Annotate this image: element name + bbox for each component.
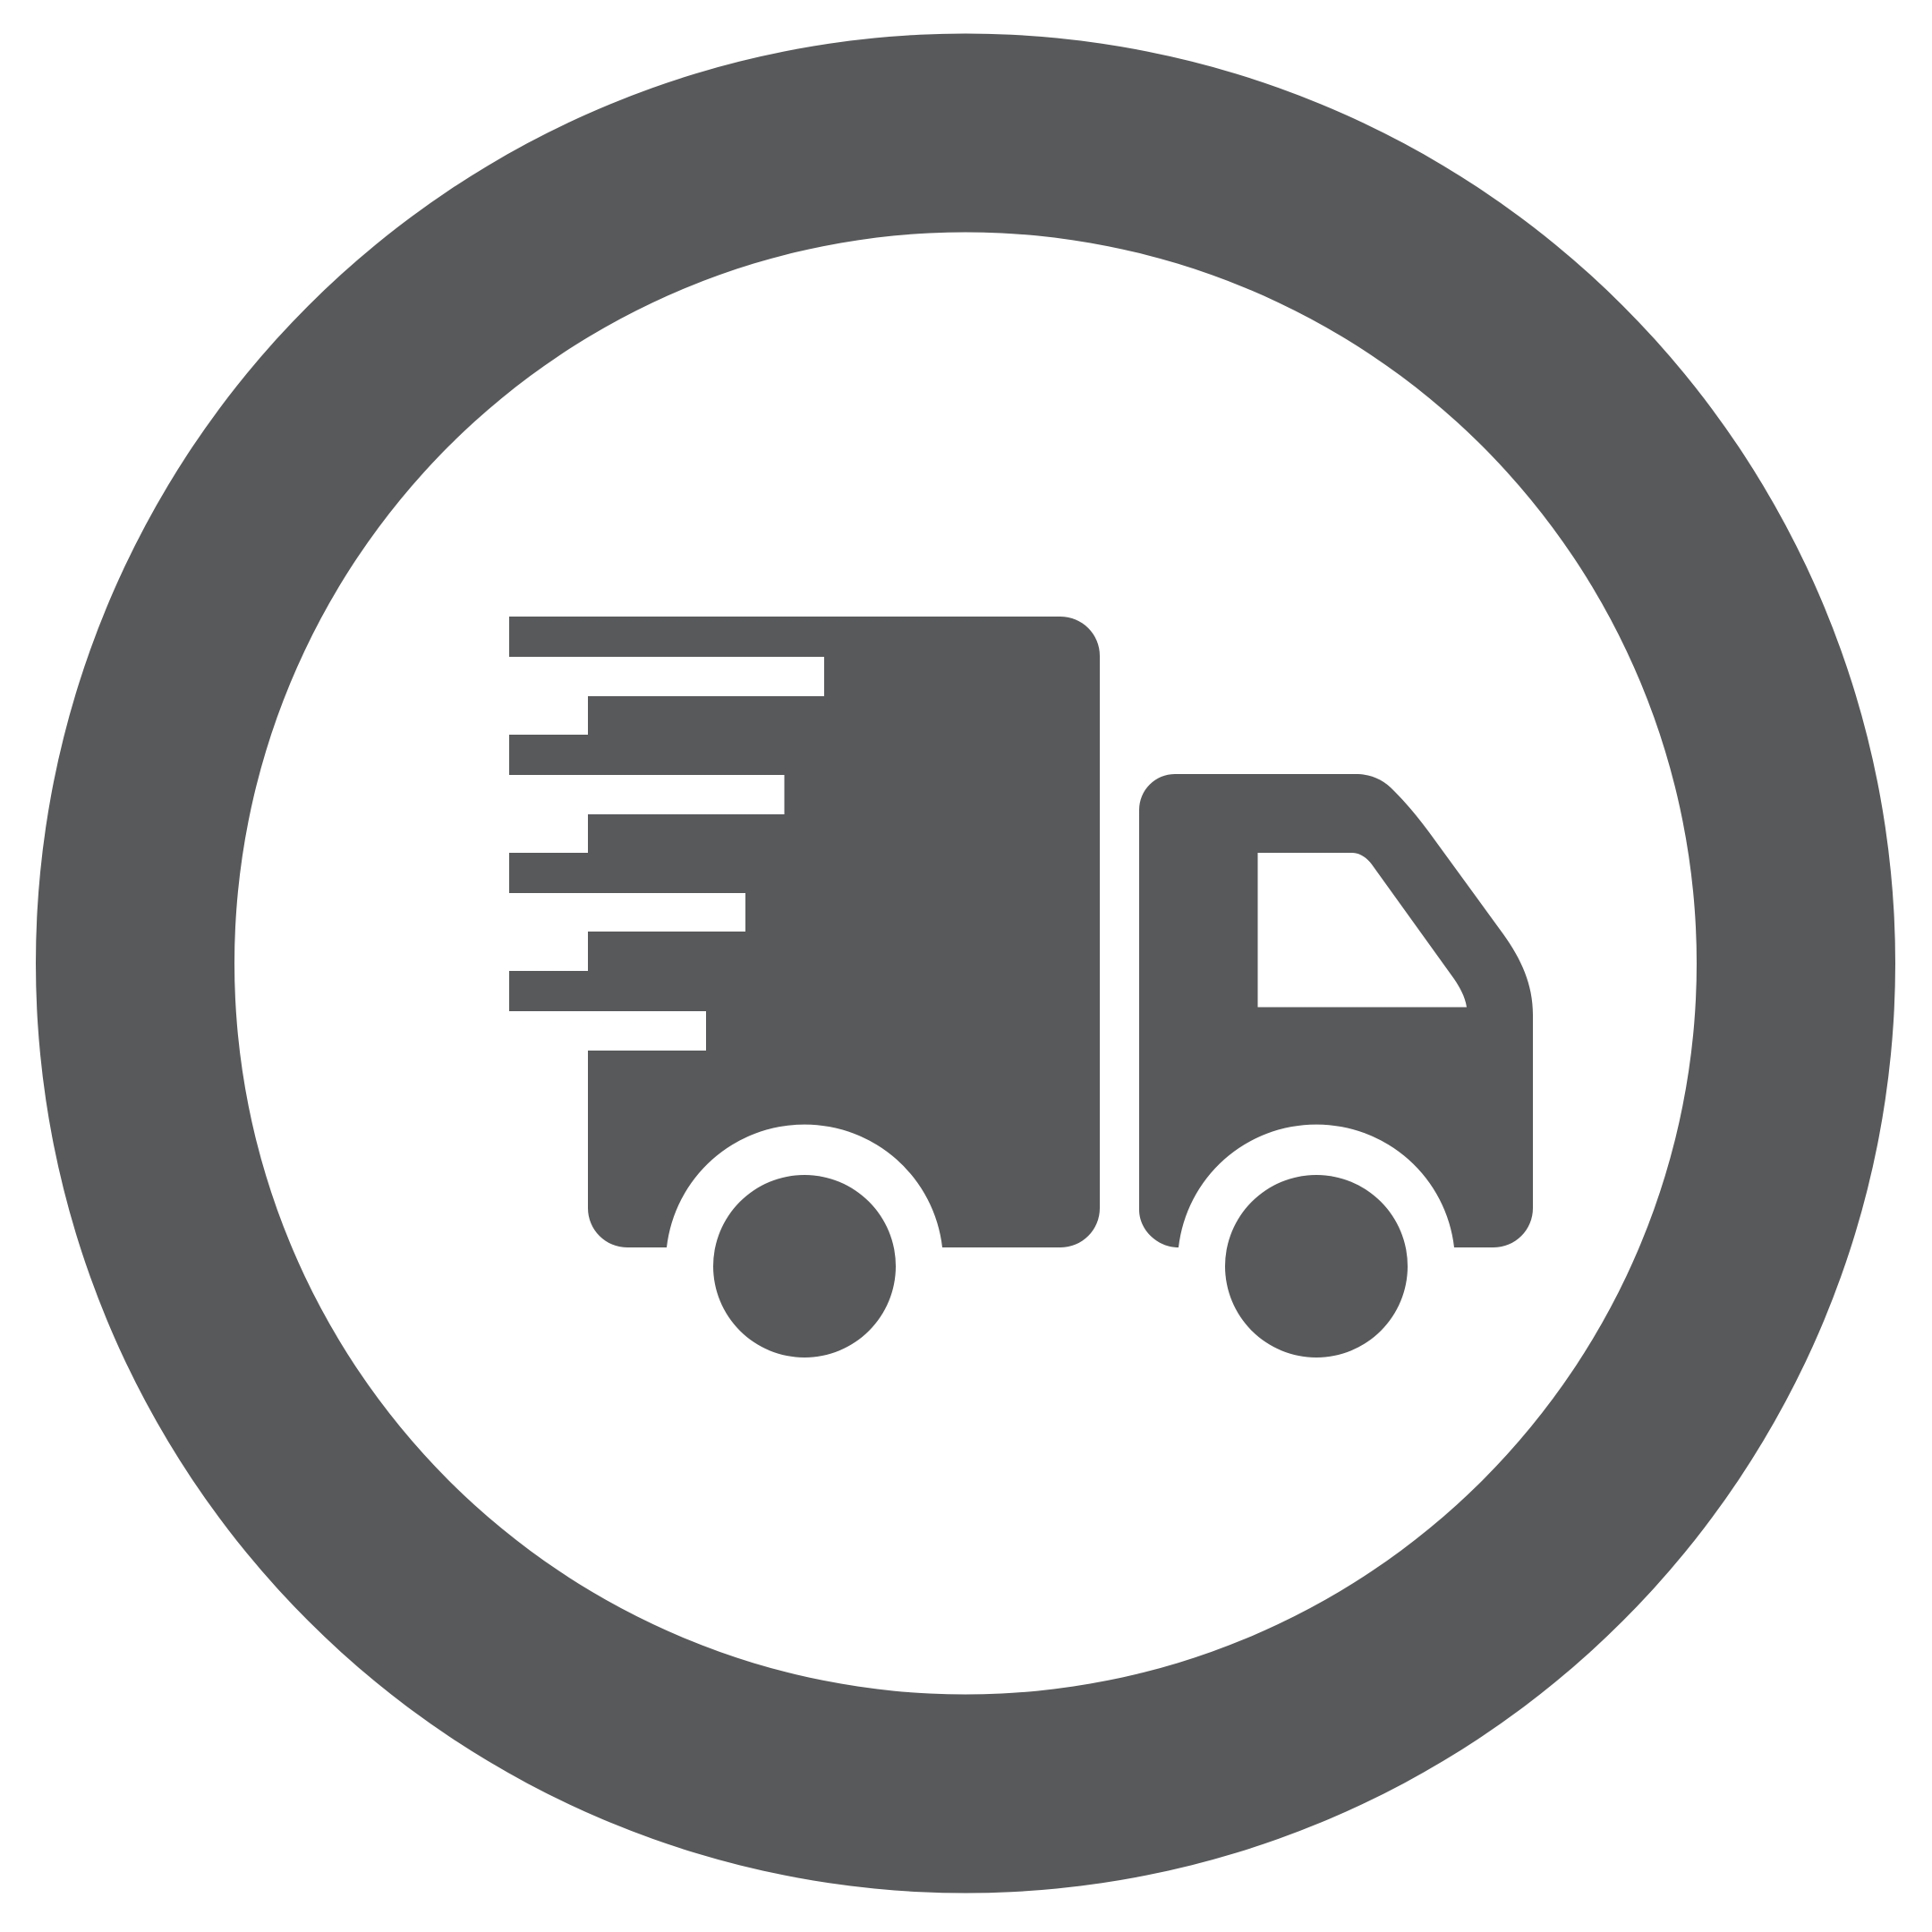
- truck cab with window: [1139, 774, 1533, 1247]
- truck cargo box with speed lines: [509, 617, 1100, 1247]
- truck rear wheel: [713, 1175, 896, 1358]
- truck front wheel: [1225, 1175, 1408, 1358]
- icon: truck: [509, 617, 1533, 1358]
